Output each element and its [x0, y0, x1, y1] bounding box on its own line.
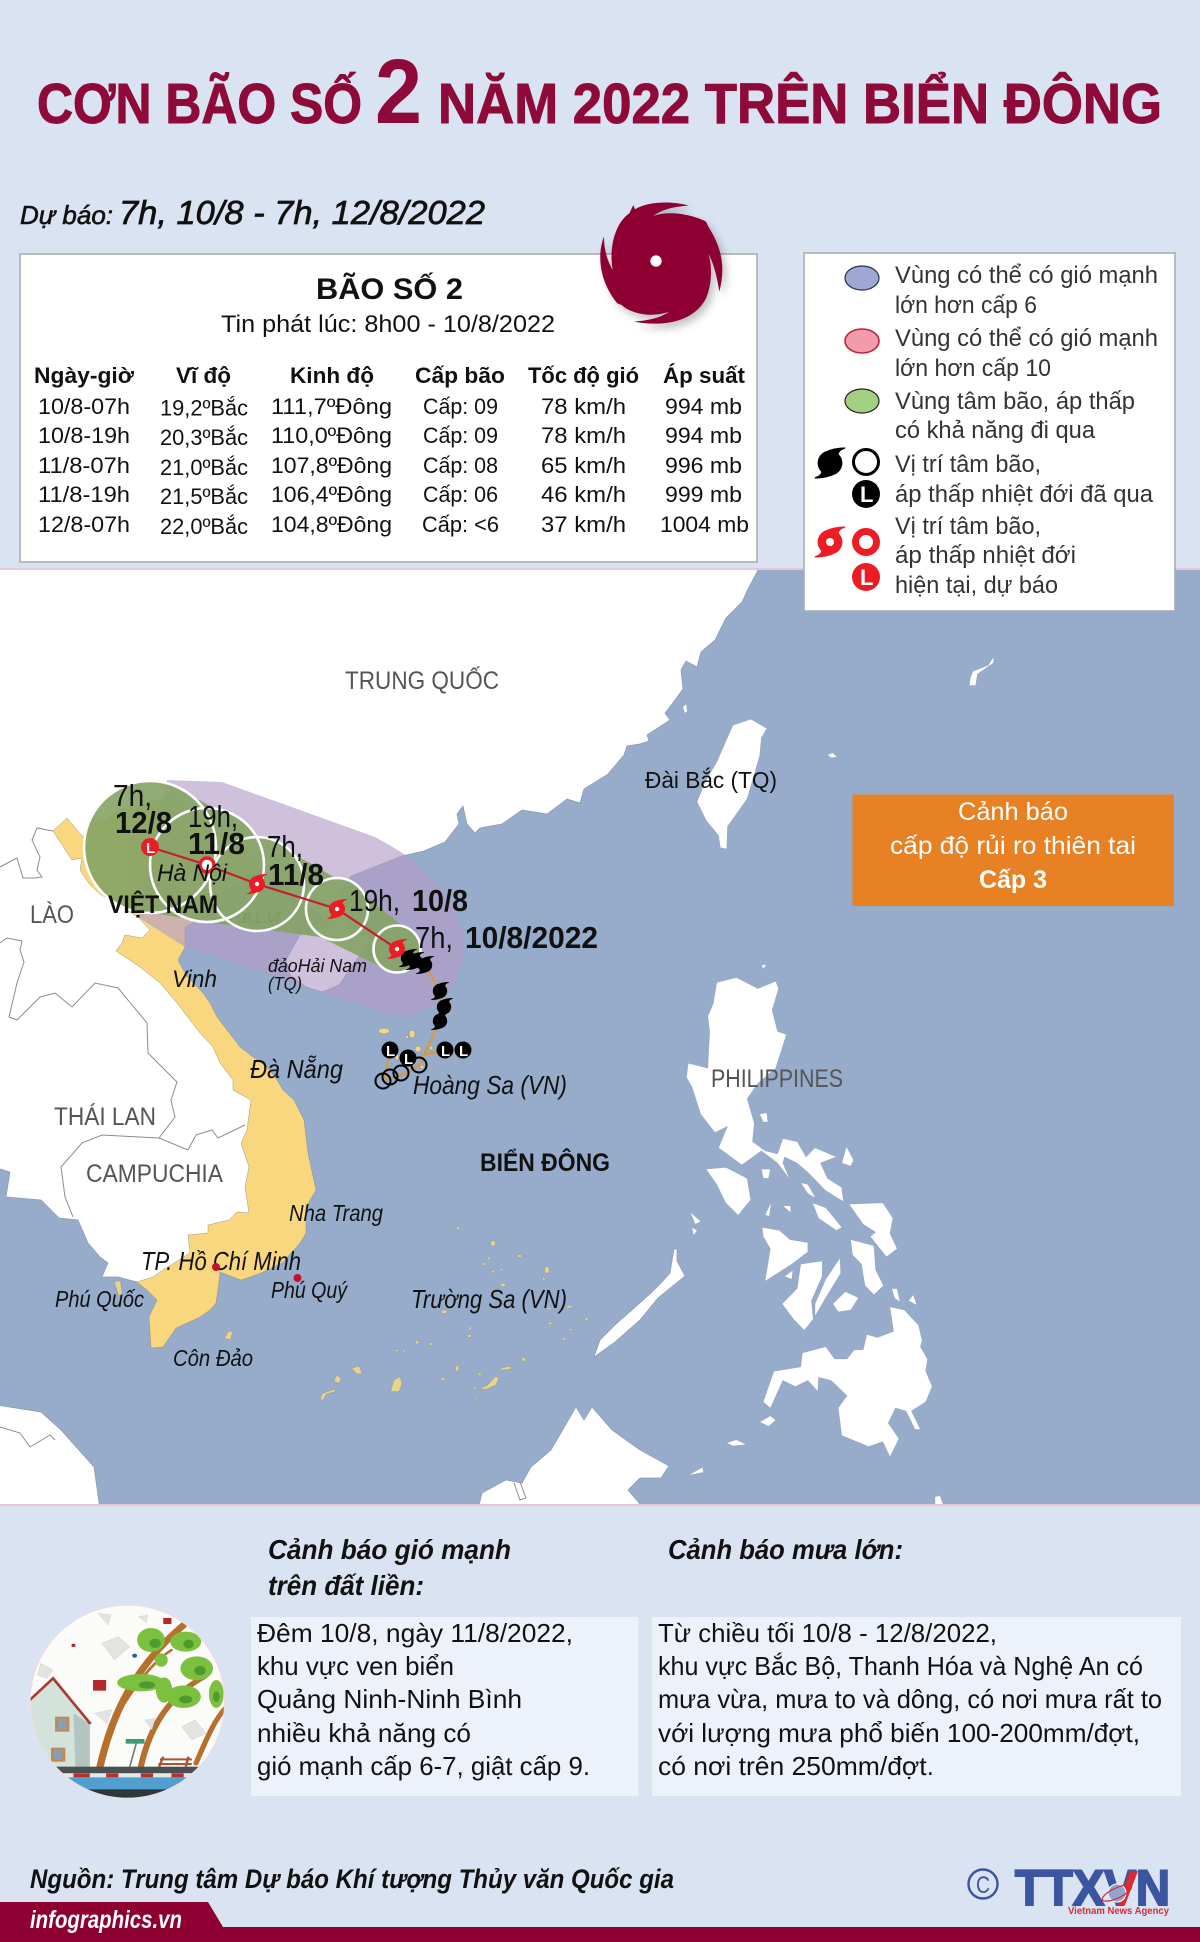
- table header row: Cấp bão: [415, 363, 505, 388]
- land: Vietnam: [53, 797, 316, 1348]
- logo: TTXVN: C: [976, 1872, 990, 1899]
- text block: wind warning: gió mạnh cấp 6-7, giật cấp 9.: [257, 1751, 590, 1781]
- logo: TTXVN: Vietnam News Agency: [1068, 1905, 1169, 1917]
- storm time labels: 10/8: [412, 883, 468, 918]
- text block: wind warning: Quảng Ninh-Ninh Bình: [257, 1684, 522, 1714]
- table row 11/8-19h: 106,4ºĐông: [271, 482, 392, 507]
- map labels: cities and islands: Phú Quốc: [55, 1286, 144, 1312]
- table row 10/8-07h: 78 km/h: [541, 394, 626, 419]
- trees: [100, 1625, 225, 1767]
- footer bar: infographics.vn: [30, 1906, 182, 1934]
- heading: wind warning: [268, 1534, 511, 1601]
- table row 10/8-07h: [38, 394, 742, 420]
- text block: heavy rain warning: mưa vừa, mưa to và dông, có nơi mưa rất to: [658, 1684, 1162, 1714]
- legend: storm centre zone: Vùng tâm bão, áp thấp: [895, 388, 1135, 415]
- legend: past positions: Vị trí tâm bão,: [895, 451, 1041, 478]
- table header row: Áp suất: [663, 363, 746, 388]
- storm time labels: 11/8: [188, 826, 245, 861]
- Hoàng Sa islands: [378, 1028, 433, 1069]
- table header row: [34, 363, 746, 388]
- table row 10/8-19h: 10/8-19h: [38, 423, 130, 448]
- table row 10/8-19h: 110,0ºĐông: [271, 423, 392, 448]
- land: Palawan: [594, 1249, 685, 1357]
- text block: wind warning: nhiều khả năng có: [257, 1718, 471, 1748]
- table row 11/8-19h: Cấp: 06: [423, 482, 498, 507]
- past low pressure markers: L: [386, 1043, 395, 1060]
- past low pressure markers: L: [404, 1051, 413, 1068]
- legend: storm centre zone: có khả năng đi qua: [895, 417, 1096, 444]
- map labels: cities and islands: TP. Hồ Chí Minh: [141, 1246, 301, 1276]
- past track: [383, 965, 463, 1081]
- legend: current and forecast positions: áp thấp nhiệt đới: [895, 542, 1076, 569]
- table row 10/8-07h: 19,2ºBắc: [160, 396, 248, 420]
- table row 10/8-07h: 111,7ºĐông: [271, 394, 392, 419]
- legend: past positions: [814, 448, 1154, 508]
- heading: wind warning: trên đất liền:: [268, 1570, 424, 1601]
- title: [37, 41, 1162, 143]
- street sign: [126, 1739, 144, 1767]
- storm time labels: [113, 778, 598, 955]
- text block: heavy rain warning: khu vực Bắc Bộ, Thanh Hóa và Nghệ An có: [658, 1651, 1143, 1681]
- table row 10/8-07h: Cấp: 09: [423, 394, 498, 419]
- storm time labels: 19h,: [188, 799, 238, 834]
- icon: typhoon emblem: [600, 203, 722, 324]
- table row 11/8-07h: 996 mb: [665, 453, 742, 478]
- text block: heavy rain warning: [652, 1617, 1181, 1796]
- table row 10/8-19h: Cấp: 09: [423, 423, 498, 448]
- text block: heavy rain warning: với lượng mưa phổ biến 100-200mm/đợt,: [658, 1718, 1140, 1748]
- map labels: cities and islands: [55, 860, 567, 1371]
- past low pressure markers: L: [459, 1043, 468, 1060]
- source line: Nguồn: Trung tâm Dự báo Khí tượng Thủy văn Quốc gia: [30, 1864, 674, 1894]
- legend: current and forecast positions: hiện tại, dự báo: [895, 572, 1058, 599]
- legend: wind above level 10: [845, 325, 1158, 382]
- storm centre probable zone: [84, 781, 420, 972]
- map labels: countries and regions: BIỂN ĐÔNG: [480, 1147, 610, 1177]
- forecast track: [150, 847, 397, 949]
- legend: past positions: L: [860, 482, 873, 507]
- table row 10/8-07h: 994 mb: [665, 394, 742, 419]
- table row 11/8-07h: [38, 453, 742, 480]
- map labels: cities and islands: Nha Trang: [289, 1200, 383, 1226]
- callout: disaster risk level: Cấp 3: [979, 866, 1047, 894]
- map labels: cities and islands: (TQ): [268, 974, 302, 994]
- legend: wind above level 10: lớn hơn cấp 10: [895, 355, 1051, 382]
- map labels: countries and regions: THÁI LAN: [54, 1102, 156, 1131]
- table row 11/8-07h: 107,8ºĐông: [271, 453, 392, 478]
- table row 11/8-19h: [38, 482, 742, 509]
- storm time labels: 7h,: [415, 920, 453, 955]
- strong wind zone: [138, 780, 464, 1015]
- text block: wind warning: [251, 1617, 638, 1796]
- title: 2: [375, 41, 422, 143]
- table row 12/8-07h: 22,0ºBắc: [160, 514, 248, 539]
- callout: disaster risk level: [852, 794, 1174, 906]
- storm time labels: 12/8: [115, 805, 172, 840]
- table row 12/8-07h: [38, 512, 749, 539]
- legend: storm centre zone: [845, 388, 1135, 444]
- logo: TTXVN: TTXVN: [1015, 1860, 1170, 1916]
- map labels: cities and islands: Côn Đảo: [173, 1345, 253, 1371]
- panel: forecast table: [20, 254, 757, 562]
- table row 10/8-19h: [38, 423, 742, 450]
- forecast period heading: Dự báo:: [20, 200, 113, 230]
- map labels: cities and islands: Hoàng Sa (VN): [413, 1070, 567, 1100]
- text block: heavy rain warning: Từ chiều tối 10/8 - 12/8/2022,: [658, 1618, 997, 1648]
- land: Philippines, Taiwan and northern islets: [683, 657, 994, 1506]
- map labels: countries and regions: TRUNG QUỐC: [345, 665, 499, 695]
- table row 11/8-19h: 46 km/h: [541, 482, 626, 507]
- map labels: cities and islands: đảoHải Nam: [268, 956, 367, 976]
- table row 11/8-19h: 11/8-19h: [38, 482, 130, 507]
- table row 11/8-19h: 21,5ºBắc: [160, 484, 248, 509]
- legend: past positions: áp thấp nhiệt đới đã qua: [895, 481, 1154, 508]
- table row 12/8-07h: 104,8ºĐông: [271, 512, 392, 537]
- legend: current and forecast positions: [814, 513, 1076, 599]
- legend: wind above level 6: [845, 262, 1158, 319]
- map labels: countries and regions: VIỆT NAM: [108, 889, 218, 919]
- table row 10/8-19h: 994 mb: [665, 423, 742, 448]
- text block: wind warning: Đêm 10/8, ngày 11/8/2022,: [257, 1618, 573, 1648]
- map panel: [0, 558, 1200, 1512]
- storm time labels: 7h,: [113, 778, 152, 813]
- past low pressure markers: L: [441, 1043, 450, 1060]
- past low pressure markers: [382, 1042, 472, 1068]
- legend: current and forecast positions: L: [860, 565, 873, 590]
- table header row: Vĩ độ: [176, 363, 231, 388]
- table row 12/8-07h: 1004 mb: [660, 512, 749, 537]
- past depression rings: [376, 1058, 426, 1088]
- table row 11/8-07h: 11/8-07h: [38, 453, 130, 478]
- map labels: countries and regions: PHILIPPINES: [711, 1065, 843, 1093]
- past storm positions: [399, 949, 453, 1030]
- table heading: BÃO SỐ 2: [316, 272, 463, 306]
- Bạch Long Vĩ label: B.L.Vĩ: [242, 910, 282, 926]
- city dots: [212, 1263, 302, 1282]
- foliage: [117, 1628, 224, 1708]
- heading: heavy rain warning: Cảnh báo mưa lớn:: [668, 1534, 903, 1565]
- road and water: [56, 1766, 198, 1798]
- map labels: cities and islands: Vinh: [172, 966, 217, 993]
- title: NĂM 2022 TRÊN BIỂN ĐÔNG: [438, 71, 1162, 136]
- heading: wind warning: Cảnh báo gió mạnh: [268, 1534, 511, 1565]
- map labels: cities and islands: Đà Nẵng: [250, 1054, 343, 1084]
- illustration: storm wind over house and trees: [24, 1600, 233, 1803]
- map labels: countries and regions: [30, 665, 843, 1188]
- storm time labels: 7h,: [267, 829, 303, 864]
- callout: disaster risk level: Cảnh báo: [958, 798, 1068, 826]
- land: China and Indochina: [0, 564, 758, 1348]
- text block: heavy rain warning: có nơi trên 250mm/đợt.: [658, 1751, 934, 1781]
- table row 10/8-19h: 20,3ºBắc: [160, 425, 248, 450]
- map labels: cities and islands: Trường Sa (VN): [411, 1284, 567, 1314]
- country borders: [0, 828, 526, 1500]
- legend: current and forecast positions: Vị trí tâm bão,: [895, 513, 1041, 540]
- table row 11/8-19h: 999 mb: [665, 482, 742, 507]
- forecast circles: [84, 781, 420, 972]
- table header row: Kinh độ: [290, 363, 374, 388]
- table row 11/8-07h: 65 km/h: [541, 453, 626, 478]
- land: Hainan island: [286, 925, 370, 992]
- map labels: cities and islands: Phú Quý: [271, 1277, 348, 1303]
- callout: disaster risk level: cấp độ rủi ro thiên tai: [890, 832, 1136, 860]
- map labels: cities and islands: Hà Nội: [157, 860, 228, 887]
- table row 10/8-19h: 78 km/h: [541, 423, 626, 448]
- issue time: Tin phát lúc: 8h00 - 10/8/2022: [221, 311, 555, 338]
- footer bar: [0, 1902, 1200, 1942]
- storm time labels: 19h,: [349, 883, 400, 918]
- table header row: Tốc độ gió: [528, 363, 639, 388]
- house: [24, 1678, 91, 1768]
- map labels: countries and regions: Đài Bắc (TQ): [645, 767, 777, 793]
- table row 11/8-07h: Cấp: 08: [423, 453, 498, 478]
- table row 11/8-07h: 21,0ºBắc: [160, 455, 248, 480]
- storm time labels: 11/8: [268, 857, 324, 892]
- table row 12/8-07h: Cấp: <6: [422, 512, 499, 537]
- legend: wind above level 10: Vùng có thể có gió mạnh: [895, 325, 1158, 352]
- table row 10/8-07h: 10/8-07h: [38, 394, 130, 419]
- forecast period heading: 7h, 10/8 - 7h, 12/8/2022: [119, 194, 485, 231]
- table header row: Ngày-giờ: [34, 363, 134, 388]
- text block: wind warning: khu vực ven biển: [257, 1651, 454, 1681]
- land: Malaysia and Borneo: [0, 1405, 669, 1510]
- fence: [158, 1757, 192, 1767]
- map labels: countries and regions: LÀO: [30, 900, 74, 929]
- table row 12/8-07h: 37 km/h: [541, 512, 626, 537]
- panel: legend: [804, 253, 1175, 611]
- flying debris: [38, 1613, 206, 1740]
- forecast storm markers: [141, 838, 407, 959]
- map frame edges: [0, 558, 1200, 1512]
- table row 12/8-07h: 12/8-07h: [38, 512, 130, 537]
- storm time labels: 10/8/2022: [465, 920, 598, 955]
- legend: wind above level 6: Vùng có thể có gió mạnh: [895, 262, 1158, 289]
- title: CƠN BÃO SỐ: [37, 71, 362, 136]
- legend: wind above level 6: lớn hơn cấp 6: [895, 292, 1037, 319]
- southern islands of Vietnam: [114, 1227, 588, 1401]
- map labels: countries and regions: CAMPUCHIA: [86, 1160, 223, 1188]
- forecast storm markers: L: [146, 840, 155, 857]
